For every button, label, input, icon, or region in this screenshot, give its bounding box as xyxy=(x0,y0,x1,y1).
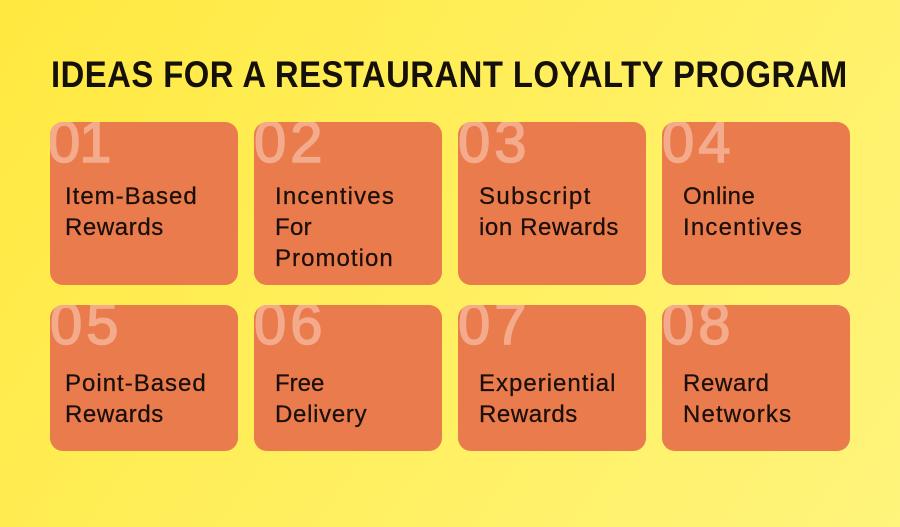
text: subscription rewards xyxy=(479,183,619,241)
text: online incentives: Incentives xyxy=(683,214,803,241)
text: online incentives xyxy=(683,183,803,241)
text: reward networks: Reward xyxy=(683,370,770,397)
panel: card 05 xyxy=(50,305,238,451)
text: point-based rewards xyxy=(65,370,207,428)
text: item-based rewards: Item-Based xyxy=(65,183,198,210)
text: subscription rewards: Subscript xyxy=(479,183,592,210)
text: experiential rewards: Rewards xyxy=(479,401,578,428)
title: IDEAS FOR A RESTAURANT LOYALTY PROGRAM xyxy=(51,53,848,95)
text: item-based rewards xyxy=(65,183,198,241)
text: incentives for promotion: Promotion xyxy=(275,245,394,272)
text: free delivery xyxy=(275,370,367,428)
panel: card 01 xyxy=(50,122,238,285)
text: free delivery: Delivery xyxy=(275,401,367,428)
text: point-based rewards: Rewards xyxy=(65,401,164,428)
text: reward networks xyxy=(683,370,792,428)
text: experiential rewards xyxy=(479,370,616,428)
text: incentives for promotion xyxy=(275,183,395,272)
panel: card 07 xyxy=(458,305,646,451)
text: incentives for promotion: For xyxy=(275,214,312,241)
text: online incentives: Online xyxy=(683,183,755,210)
panel: card 06 xyxy=(254,305,442,451)
panel: card 03 xyxy=(458,122,646,285)
text: point-based rewards: Point-Based xyxy=(65,370,207,397)
panel: card 04 xyxy=(662,122,850,285)
panel: card 08 xyxy=(662,305,850,451)
text: reward networks: Networks xyxy=(683,401,792,428)
text: incentives for promotion: Incentives xyxy=(275,183,395,210)
panel: card 02 xyxy=(254,122,442,285)
text: subscription rewards: ion Rewards xyxy=(479,214,619,241)
text: experiential rewards: Experiential xyxy=(479,370,616,397)
text: free delivery: Free xyxy=(275,370,324,397)
text: item-based rewards: Rewards xyxy=(65,214,164,241)
